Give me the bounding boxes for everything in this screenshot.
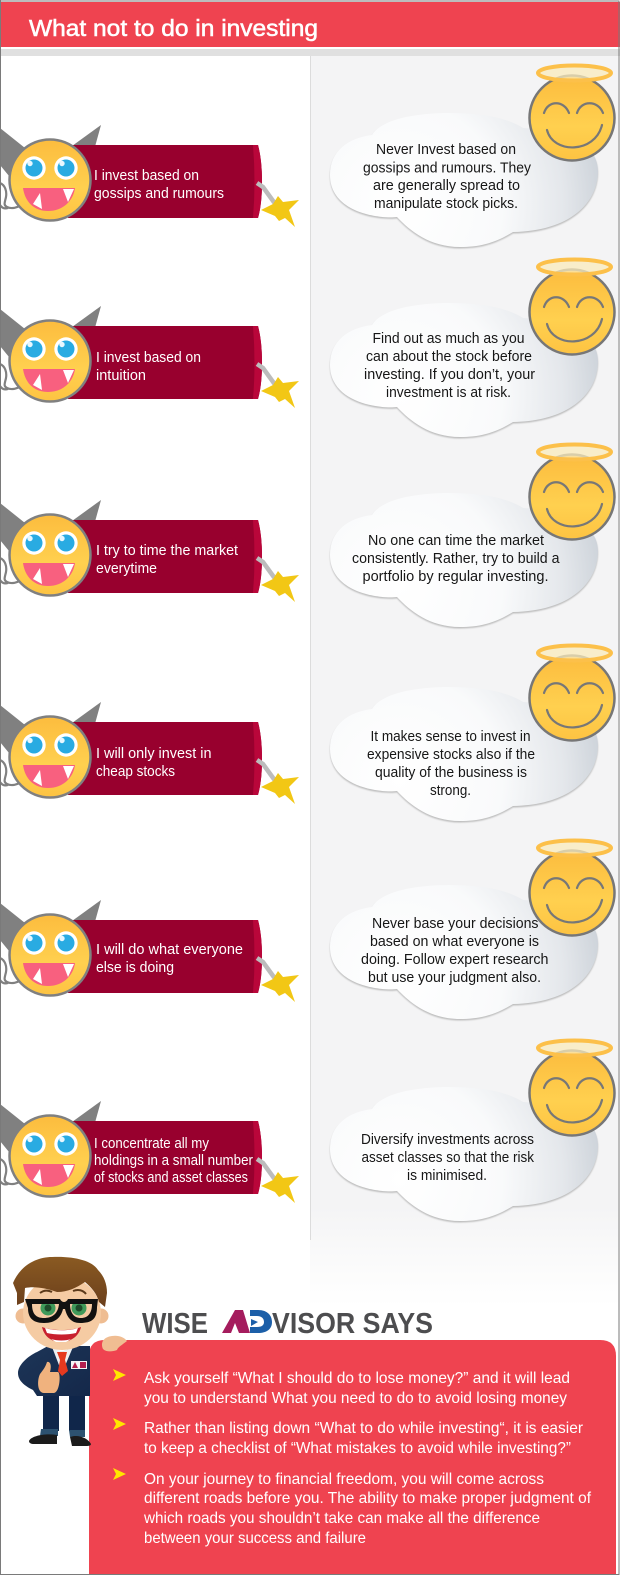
row 2 advice: cloud and angel: can about the stock before — [366, 348, 532, 365]
row 6 mistake: devil and dynamite: of stocks and asset classes — [94, 1170, 248, 1186]
row 6 mistake: devil and dynamite: I concentrate all my — [94, 1136, 210, 1152]
tip 1: Ask yourself “What I should do to lose money?” and it will lead — [144, 1370, 570, 1387]
tip 3: On your journey to financial freedom, you will come across — [144, 1471, 544, 1488]
tip 3: between your success and failure — [144, 1530, 366, 1547]
tip 2 — [113, 1418, 584, 1457]
row 1 advice: cloud and angel: gossips and rumours. They — [363, 160, 531, 176]
row 5 advice: cloud and angel: based on what everyone is — [370, 933, 539, 950]
heading: wise advisor says — [142, 1308, 433, 1340]
row 6 advice: cloud and angel — [330, 1040, 614, 1222]
row 1 mistake: devil and dynamite: I invest based on — [94, 168, 199, 184]
row 2 advice: cloud and angel: investment is at risk. — [386, 384, 511, 401]
row 5 mistake: devil and dynamite: else is doing — [96, 960, 174, 976]
row 6 advice: cloud and angel: Diversify investments across — [361, 1131, 534, 1148]
row 1 mistake: devil and dynamite — [0, 125, 299, 227]
row 2 advice: cloud and angel — [330, 260, 614, 438]
row 4 advice: cloud and angel: It makes sense to invest in — [370, 728, 530, 745]
row 1 advice: cloud and angel: manipulate stock picks. — [374, 195, 518, 212]
row 6 mistake: devil and dynamite — [0, 1101, 299, 1203]
row 1 mistake: devil and dynamite: gossips and rumours — [94, 186, 224, 202]
row 5 advice: cloud and angel: Never base your decisions — [372, 915, 538, 932]
row 3 mistake: devil and dynamite — [0, 500, 299, 602]
row 4 mistake: devil and dynamite: I will only invest in — [96, 746, 212, 762]
tip 3 — [113, 1468, 592, 1547]
title banner — [0, 2, 620, 47]
row 4 advice: cloud and angel: quality of the business is — [375, 764, 527, 781]
row 6 advice: cloud and angel: asset classes so that the risk — [362, 1149, 534, 1166]
heading: wise advisor says: WISE — [142, 1308, 208, 1340]
row 3 advice: cloud and angel: consistently. Rather, try to build a — [352, 550, 560, 567]
row 5 advice: cloud and angel: doing. Follow expert research — [361, 951, 548, 968]
right panel background — [310, 56, 618, 1306]
row 4 advice: cloud and angel: strong. — [430, 782, 471, 799]
logo mark: AD — [222, 1310, 272, 1333]
heading: wise advisor says: VISOR SAYS — [272, 1308, 433, 1340]
row 5 advice: cloud and angel — [330, 840, 614, 1020]
advisor tips panel — [89, 1340, 616, 1575]
title: What not to do in investing — [29, 15, 318, 41]
tip 2: Rather than listing down “What to do while investing“, it is easier — [144, 1420, 584, 1437]
row 3 advice: cloud and angel: portfolio by regular investing. — [362, 568, 548, 585]
row 1 advice: cloud and angel: are generally spread to — [373, 177, 520, 194]
tip 3: which roads you shouldn’t take can make all the difference — [143, 1510, 540, 1527]
row 4 advice: cloud and angel: expensive stocks also if the — [367, 746, 535, 763]
row 3 mistake: devil and dynamite: I try to time the market — [96, 543, 238, 559]
row 6 advice: cloud and angel: is minimised. — [407, 1167, 487, 1184]
row 5 advice: cloud and angel: but use your judgment also. — [368, 969, 541, 986]
row 5 mistake: devil and dynamite: I will do what everyone — [96, 942, 243, 958]
row 1 advice: cloud and angel: Never Invest based on — [376, 141, 516, 158]
row 2 advice: cloud and angel: Find out as much as you — [372, 330, 524, 347]
row 4 mistake: devil and dynamite: cheap stocks — [96, 764, 175, 780]
row 3 advice: cloud and angel: No one can time the market — [368, 532, 545, 549]
tip 1 — [113, 1369, 570, 1407]
advisor character — [13, 1257, 127, 1446]
row 2 mistake: devil and dynamite: intuition — [96, 368, 146, 384]
row 3 mistake: devil and dynamite: everytime — [96, 561, 157, 577]
row 1 advice: cloud and angel — [330, 66, 614, 248]
tip 1: you to understand What you need to do to avoid losing money — [144, 1390, 567, 1407]
tip 3: different roads before you. The ability to make proper judgment of — [144, 1490, 592, 1507]
row 6 mistake: devil and dynamite: holdings in a small number — [94, 1153, 253, 1169]
row 4 advice: cloud and angel — [330, 646, 614, 822]
row 4 mistake: devil and dynamite — [0, 702, 299, 804]
row 5 mistake: devil and dynamite — [0, 900, 299, 1002]
tip 2: to keep a checklist of “What mistakes to avoid while investing?” — [144, 1440, 571, 1457]
row 2 mistake: devil and dynamite: I invest based on — [96, 350, 201, 366]
row 3 advice: cloud and angel — [330, 444, 614, 628]
row 2 mistake: devil and dynamite — [0, 306, 299, 408]
row 2 advice: cloud and angel: investing. If you don’t, your — [364, 366, 535, 383]
